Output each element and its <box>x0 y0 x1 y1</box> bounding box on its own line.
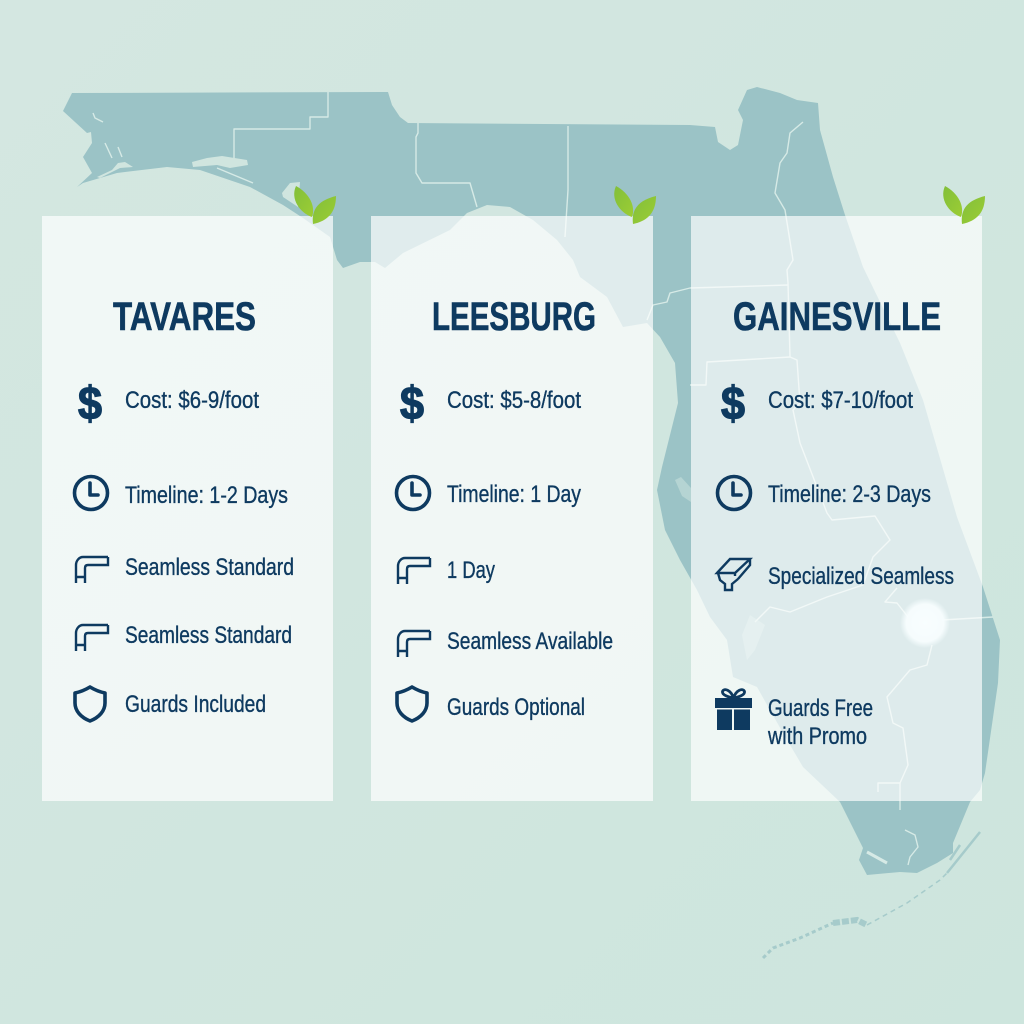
row: guards: Guards Included <box>125 691 266 718</box>
map county lines <box>93 92 993 865</box>
panel: Tavares <box>42 186 336 801</box>
row: guards promo <box>715 690 873 750</box>
row: seamless: Seamless Standard <box>125 554 294 581</box>
row: guards <box>397 687 585 721</box>
row: timeline: Timeline: 1-2 Days <box>125 482 288 509</box>
row: one day: 1 Day <box>447 557 495 584</box>
glow on lake <box>900 598 950 648</box>
map of Florida <box>63 87 1000 958</box>
row: cost <box>721 377 913 429</box>
row: guards promo: with Promo <box>767 723 867 750</box>
row: guards: Guards Optional <box>447 694 585 721</box>
map coastal bays <box>97 156 765 660</box>
panel: Leesburg <box>371 186 656 801</box>
florida keys <box>763 832 980 958</box>
icon: leaves <box>943 186 985 224</box>
heading: Gainesville: GAINESVILLE <box>733 295 941 339</box>
row: cost <box>78 377 259 429</box>
row: cost: Cost: $7-10/foot <box>768 387 913 414</box>
icon: gutter funnel <box>717 559 750 590</box>
row: seamless second: Seamless Standard <box>125 622 292 649</box>
row: cost: $ <box>78 377 102 429</box>
row: timeline <box>396 476 581 510</box>
row: specialized seamless: Specialized Seamless <box>768 563 954 590</box>
row: guards promo: Guards Free <box>768 695 873 722</box>
row: timeline: Timeline: 1 Day <box>447 481 581 508</box>
row: one day <box>398 557 495 584</box>
row: timeline <box>718 476 931 510</box>
icon: gift <box>715 690 752 730</box>
row: cost <box>400 377 581 429</box>
heading: Leesburg: LEESBURG <box>432 295 596 339</box>
row: cost: Cost: $5-8/foot <box>447 387 581 414</box>
row: timeline <box>74 476 288 510</box>
row: cost: Cost: $6-9/foot <box>125 387 259 414</box>
row: guards <box>75 687 266 721</box>
row: cost: $ <box>721 377 745 429</box>
icon: leaves <box>614 186 656 224</box>
panel: Gainesville <box>691 186 985 801</box>
row: timeline: Timeline: 2-3 Days <box>768 481 931 508</box>
icon: leaves <box>294 186 336 224</box>
row: specialized seamless <box>717 559 954 590</box>
heading: Tavares: TAVARES <box>113 295 256 339</box>
row: seamless <box>398 628 613 657</box>
row: seamless: Seamless Available <box>447 628 613 655</box>
row: seamless <box>76 554 294 583</box>
row: seamless second <box>76 622 292 651</box>
row: cost: $ <box>400 377 424 429</box>
